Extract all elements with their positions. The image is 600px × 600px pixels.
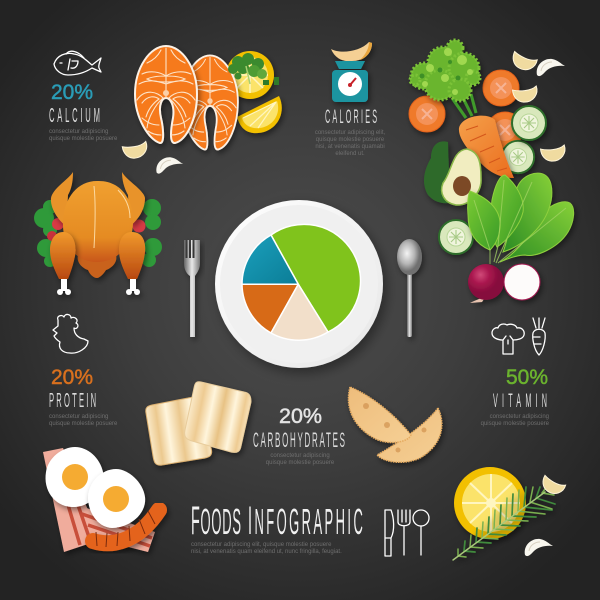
description bbox=[481, 414, 550, 427]
title: FOODS bbox=[191, 499, 241, 543]
description: consectetur adipiscing elit, bbox=[315, 130, 386, 136]
salmon steaks with lemon bbox=[135, 46, 282, 150]
fork bbox=[184, 240, 200, 337]
description: consectetur adipiscing elit, quisque molestie posuere bbox=[191, 542, 332, 548]
slice: carbohydrates bbox=[271, 284, 328, 340]
label: CARBOHYDRATES bbox=[253, 430, 345, 452]
icon: carrot bbox=[533, 318, 545, 355]
front slice bbox=[185, 382, 251, 452]
spinach bbox=[468, 173, 574, 264]
title: INFOGRAPHIC bbox=[248, 499, 363, 543]
drumsticks bbox=[50, 232, 145, 295]
body bbox=[63, 181, 133, 262]
salmon steak back bbox=[182, 55, 238, 150]
icon: chicken bbox=[53, 314, 88, 353]
percent: 50% bbox=[506, 366, 548, 389]
bread bbox=[146, 382, 251, 465]
slice: calcium bbox=[242, 235, 298, 284]
icon: cutlery bbox=[385, 510, 429, 556]
icon: broccoli bbox=[492, 324, 524, 354]
fried egg 2 bbox=[88, 469, 145, 528]
description: nisi, at venenatis quamabi bbox=[315, 144, 385, 150]
description bbox=[266, 453, 335, 466]
flap bbox=[78, 255, 116, 278]
description: consectetur adipiscing bbox=[270, 453, 330, 459]
percent: 20% bbox=[51, 366, 93, 389]
panel: carbohydrates bbox=[253, 405, 345, 466]
salmon steak front bbox=[135, 46, 197, 143]
empanadas bbox=[348, 387, 442, 462]
label: VITAMIN bbox=[493, 391, 547, 412]
lemon slice bbox=[226, 51, 274, 99]
empanada back bbox=[377, 408, 442, 462]
icon: scale bbox=[331, 42, 372, 102]
garlic clove bbox=[539, 474, 566, 498]
panel: protein bbox=[49, 314, 118, 427]
lettuce bbox=[410, 40, 480, 118]
panel: calories bbox=[315, 42, 386, 157]
lemon slice bbox=[454, 467, 526, 539]
description: quisque molestie posuere bbox=[481, 421, 550, 427]
pie chart bbox=[242, 224, 361, 340]
cucumber slices bbox=[439, 106, 546, 254]
label: PROTEIN bbox=[49, 390, 96, 412]
rosemary bbox=[453, 485, 555, 560]
vegetables bbox=[409, 40, 574, 303]
parsley bbox=[228, 53, 279, 85]
panel: calcium bbox=[49, 51, 118, 142]
spoon bbox=[397, 239, 422, 337]
description bbox=[315, 130, 386, 157]
label: CALCIUM bbox=[49, 105, 100, 127]
sausage bbox=[93, 510, 159, 543]
breakfast: bacon, eggs, sausage bbox=[43, 447, 159, 552]
fried egg 1 bbox=[46, 447, 103, 507]
lemon with rosemary bbox=[453, 467, 566, 560]
description: quisque molestie posuere bbox=[49, 421, 118, 427]
description bbox=[49, 414, 118, 427]
slice: vitamin bbox=[271, 224, 361, 332]
description: consectetur adipiscing bbox=[49, 129, 108, 135]
description: consectetur adipiscing bbox=[490, 414, 549, 420]
icon: fish bbox=[54, 51, 101, 75]
carrot bbox=[459, 116, 514, 178]
description: quisque molestie posuere bbox=[266, 460, 335, 466]
title bbox=[191, 499, 363, 543]
bacon bbox=[43, 448, 155, 552]
carrot slices bbox=[409, 70, 523, 148]
white garlic clove bbox=[525, 539, 553, 556]
garlic cloves bbox=[509, 50, 566, 162]
description: eleifend ut. bbox=[335, 151, 365, 157]
radish bbox=[468, 264, 540, 303]
plate bbox=[215, 200, 383, 368]
description: nisi, at venenatis quam eleifend ut, nunc fringilla, feugiat. bbox=[191, 549, 342, 555]
description: quisque molestie posuere bbox=[316, 137, 385, 143]
description: consectetur adipiscing bbox=[49, 414, 108, 420]
garlic near salmon bbox=[122, 141, 183, 174]
plate with pie chart bbox=[215, 200, 383, 368]
panel: vitamin bbox=[481, 318, 550, 427]
back slice bbox=[146, 397, 212, 465]
empanada front bbox=[348, 387, 411, 442]
percent: 20% bbox=[279, 405, 322, 428]
percent: 20% bbox=[51, 81, 93, 104]
label: CALORIES bbox=[325, 107, 377, 128]
lemon wedge bbox=[237, 96, 282, 133]
description bbox=[49, 129, 118, 142]
slice: protein bbox=[242, 284, 298, 333]
avocado bbox=[424, 141, 481, 205]
wings bbox=[51, 172, 145, 226]
cucumber slice under carrot bbox=[502, 141, 534, 173]
description: quisque molestie posuere bbox=[49, 136, 118, 142]
chicken bbox=[34, 172, 162, 295]
herbs and tomatoes bbox=[34, 199, 162, 267]
description bbox=[191, 542, 342, 555]
